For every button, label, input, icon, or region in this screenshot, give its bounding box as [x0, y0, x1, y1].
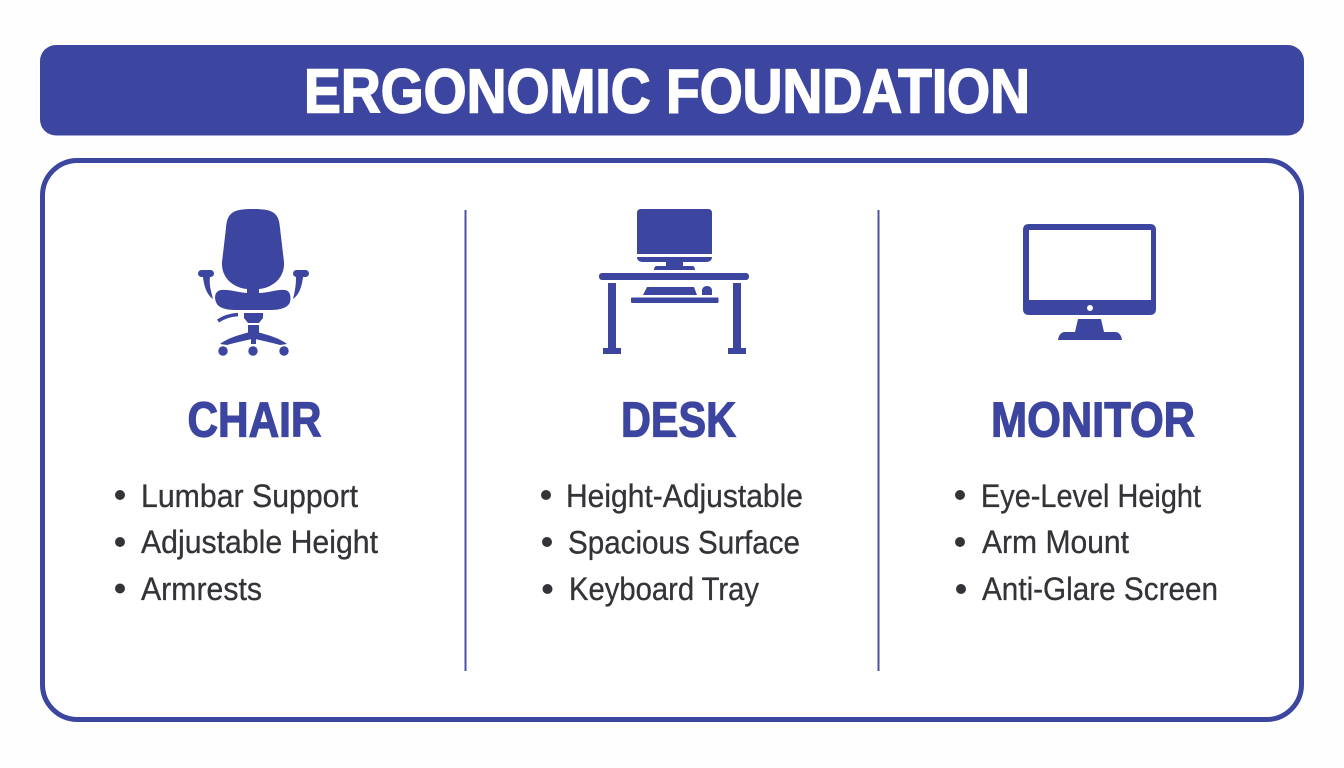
heading: chair: CHAIR — [188, 394, 322, 448]
icon: monitor — [1023, 224, 1156, 340]
list: chair features: Armrests — [141, 571, 262, 607]
heading: desk: DESK — [621, 394, 736, 448]
icon: office chair — [198, 209, 309, 356]
column: desk — [541, 209, 803, 607]
list: desk features: Spacious Surface — [568, 524, 800, 560]
list: monitor features: Eye-Level Height — [981, 478, 1201, 514]
title banner — [40, 45, 1304, 136]
list: chair features — [115, 478, 378, 607]
list: desk features — [541, 478, 803, 607]
list: desk features: Keyboard Tray — [569, 571, 759, 607]
icon: desk with computer — [599, 209, 749, 354]
list: monitor features: Arm Mount — [982, 524, 1129, 560]
list: monitor features: Anti-Glare Screen — [982, 571, 1218, 607]
title: ERGONOMIC FOUNDATION — [304, 58, 1030, 126]
column: chair — [115, 209, 378, 607]
column: monitor — [955, 224, 1218, 607]
panel: three ergonomic categories — [42, 160, 1302, 720]
list: monitor features — [955, 478, 1218, 607]
list: chair features: Lumbar Support — [141, 478, 358, 514]
list: chair features: Adjustable Height — [141, 524, 378, 560]
heading: monitor: MONITOR — [991, 394, 1195, 448]
list: desk features: Height-Adjustable — [566, 478, 803, 514]
